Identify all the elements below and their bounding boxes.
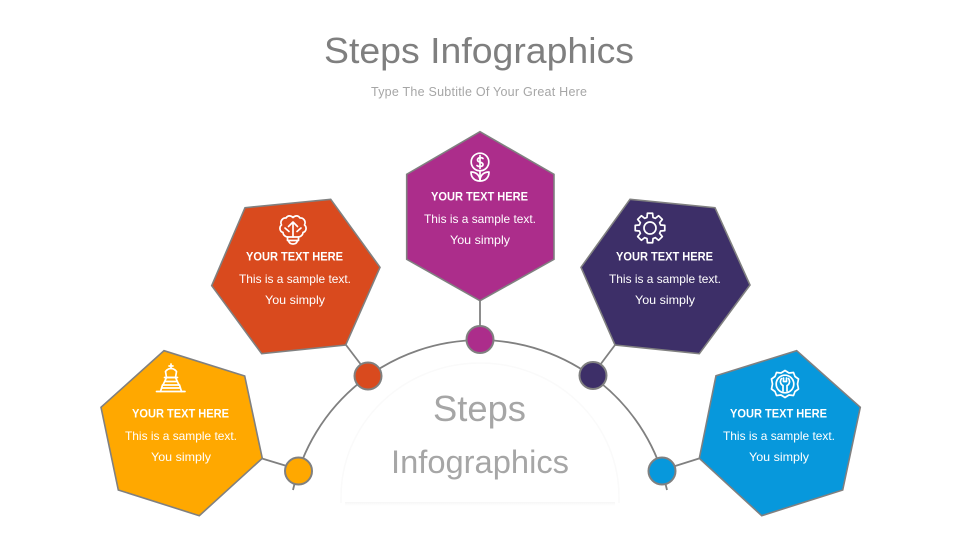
connector: red [346, 345, 362, 366]
panel: red step [212, 199, 380, 354]
orange hexagon [101, 351, 262, 516]
body text: You simply [635, 293, 695, 307]
body text: You simply [151, 450, 211, 464]
blue hexagon [699, 351, 860, 516]
node: blue [648, 458, 676, 484]
central semicircle with label [341, 363, 619, 506]
icon: wrench gear [772, 370, 798, 398]
connector: magenta [479, 300, 481, 328]
body text: This is a sample text. [424, 212, 536, 226]
heading: YOUR TEXT HERE [431, 190, 528, 204]
body text: This is a sample text. [125, 429, 237, 443]
heading: YOUR TEXT HERE [616, 250, 713, 264]
body text [125, 429, 237, 464]
subtitle: Type The Subtitle Of Your Great Here [371, 85, 587, 99]
icon: gear [635, 213, 665, 243]
icon: chess king [156, 364, 185, 392]
node: red [354, 362, 382, 390]
magenta hexagon [407, 132, 554, 301]
red hexagon [212, 199, 380, 354]
panel: magenta step [407, 132, 554, 301]
body text: You simply [749, 450, 809, 464]
connector: indigo [600, 345, 615, 365]
connector: orange [262, 458, 290, 467]
title: Steps Infographics [324, 30, 634, 71]
panel: indigo step [581, 199, 750, 354]
indigo hexagon [581, 199, 750, 354]
heading: YOUR TEXT HERE [730, 406, 827, 420]
connector: blue [672, 458, 699, 467]
icon: money flower [471, 153, 489, 181]
connecting arc [293, 340, 667, 490]
central semicircle with label: Infographics [391, 444, 569, 480]
node: magenta [466, 326, 494, 353]
icon: brain bulb [280, 216, 306, 244]
node: indigo [580, 362, 606, 389]
heading: YOUR TEXT HERE [132, 406, 229, 420]
central semicircle with label: Steps [433, 388, 526, 429]
body text [424, 212, 536, 247]
body text [723, 429, 835, 464]
node: orange [285, 458, 312, 484]
heading: YOUR TEXT HERE [246, 250, 343, 264]
body text: This is a sample text. [239, 272, 351, 286]
panel: blue step [699, 351, 860, 516]
body text: This is a sample text. [723, 429, 835, 443]
body text: This is a sample text. [609, 272, 721, 286]
body text [239, 272, 351, 307]
body text: You simply [265, 293, 325, 307]
body text: You simply [450, 233, 510, 247]
body text [609, 272, 721, 307]
panel: orange step [101, 351, 262, 516]
